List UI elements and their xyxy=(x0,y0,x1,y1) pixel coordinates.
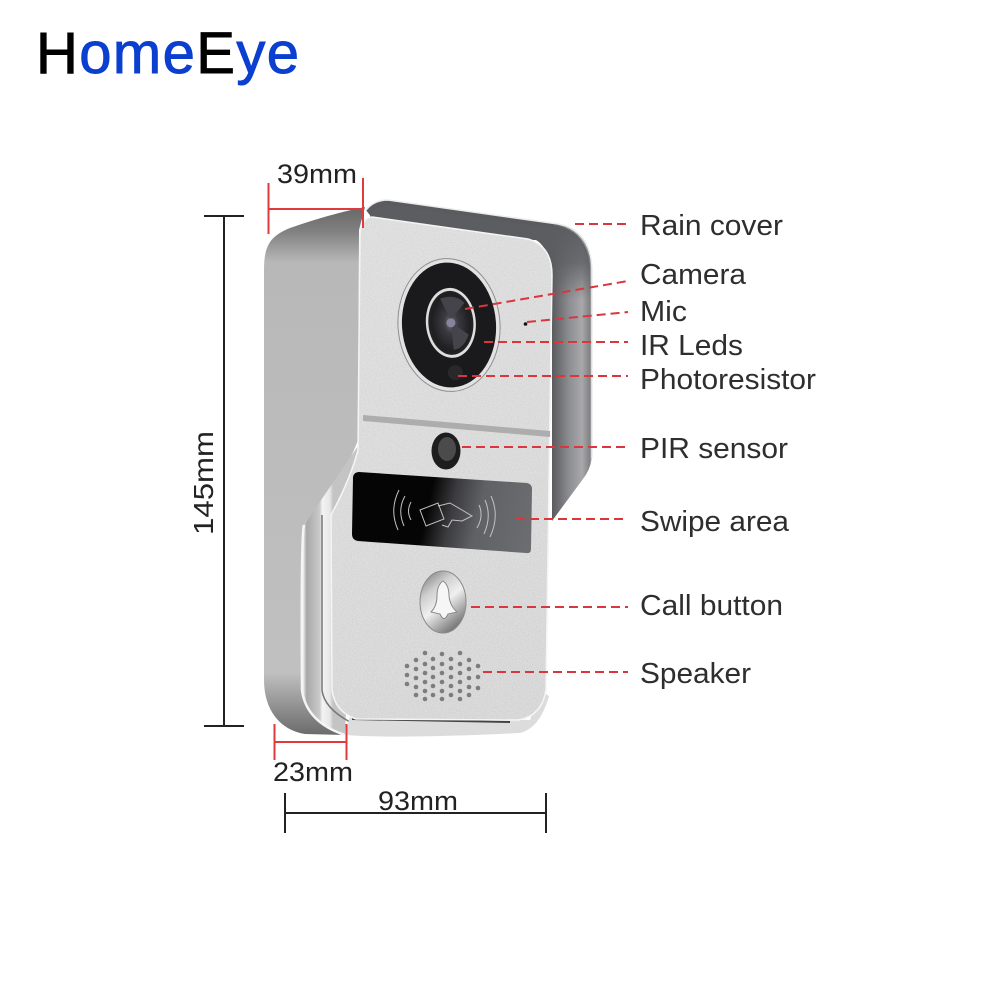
camera module xyxy=(393,255,505,395)
dimension: 145mm height: 145mm xyxy=(188,431,219,535)
infographic canvas xyxy=(40,32,816,833)
lens xyxy=(423,286,478,360)
callout: mic: Mic xyxy=(640,296,687,328)
callout: camera: Camera xyxy=(640,259,747,291)
dimension: 39mm depth xyxy=(268,159,363,234)
call button xyxy=(420,571,466,633)
divider band xyxy=(363,415,550,437)
callout: swipe area: Swipe area xyxy=(640,506,790,538)
photoresistor xyxy=(447,365,463,381)
callout: camera xyxy=(465,259,747,309)
front plate xyxy=(330,215,554,723)
dimension: 39mm depth: 39mm xyxy=(277,159,357,189)
dimension: 93mm width: 93mm xyxy=(378,786,458,816)
side housing xyxy=(264,207,549,737)
mic hole xyxy=(524,322,527,326)
rain cover xyxy=(366,200,592,521)
logo: HomeEye: HomeEye xyxy=(36,21,299,86)
dimension: 23mm depth xyxy=(273,724,353,787)
PIR sensor xyxy=(432,432,460,470)
swipe area xyxy=(350,470,535,556)
dimension: 93mm width xyxy=(285,786,546,833)
callout: photoresistor: Photoresistor xyxy=(640,364,816,396)
callout: mic xyxy=(527,296,687,328)
callout: speaker: Speaker xyxy=(640,658,751,690)
callout: rain cover: Rain cover xyxy=(640,210,783,242)
callout: IR leds: IR Leds xyxy=(640,330,743,362)
dimension: 23mm depth: 23mm xyxy=(273,757,353,787)
swipe icon xyxy=(394,490,495,537)
callout: PIR sensor: PIR sensor xyxy=(640,433,788,465)
dimension: 145mm height xyxy=(188,216,244,726)
callout: call button: Call button xyxy=(640,590,783,622)
speaker grille xyxy=(405,651,480,701)
doorbell device xyxy=(264,200,592,737)
